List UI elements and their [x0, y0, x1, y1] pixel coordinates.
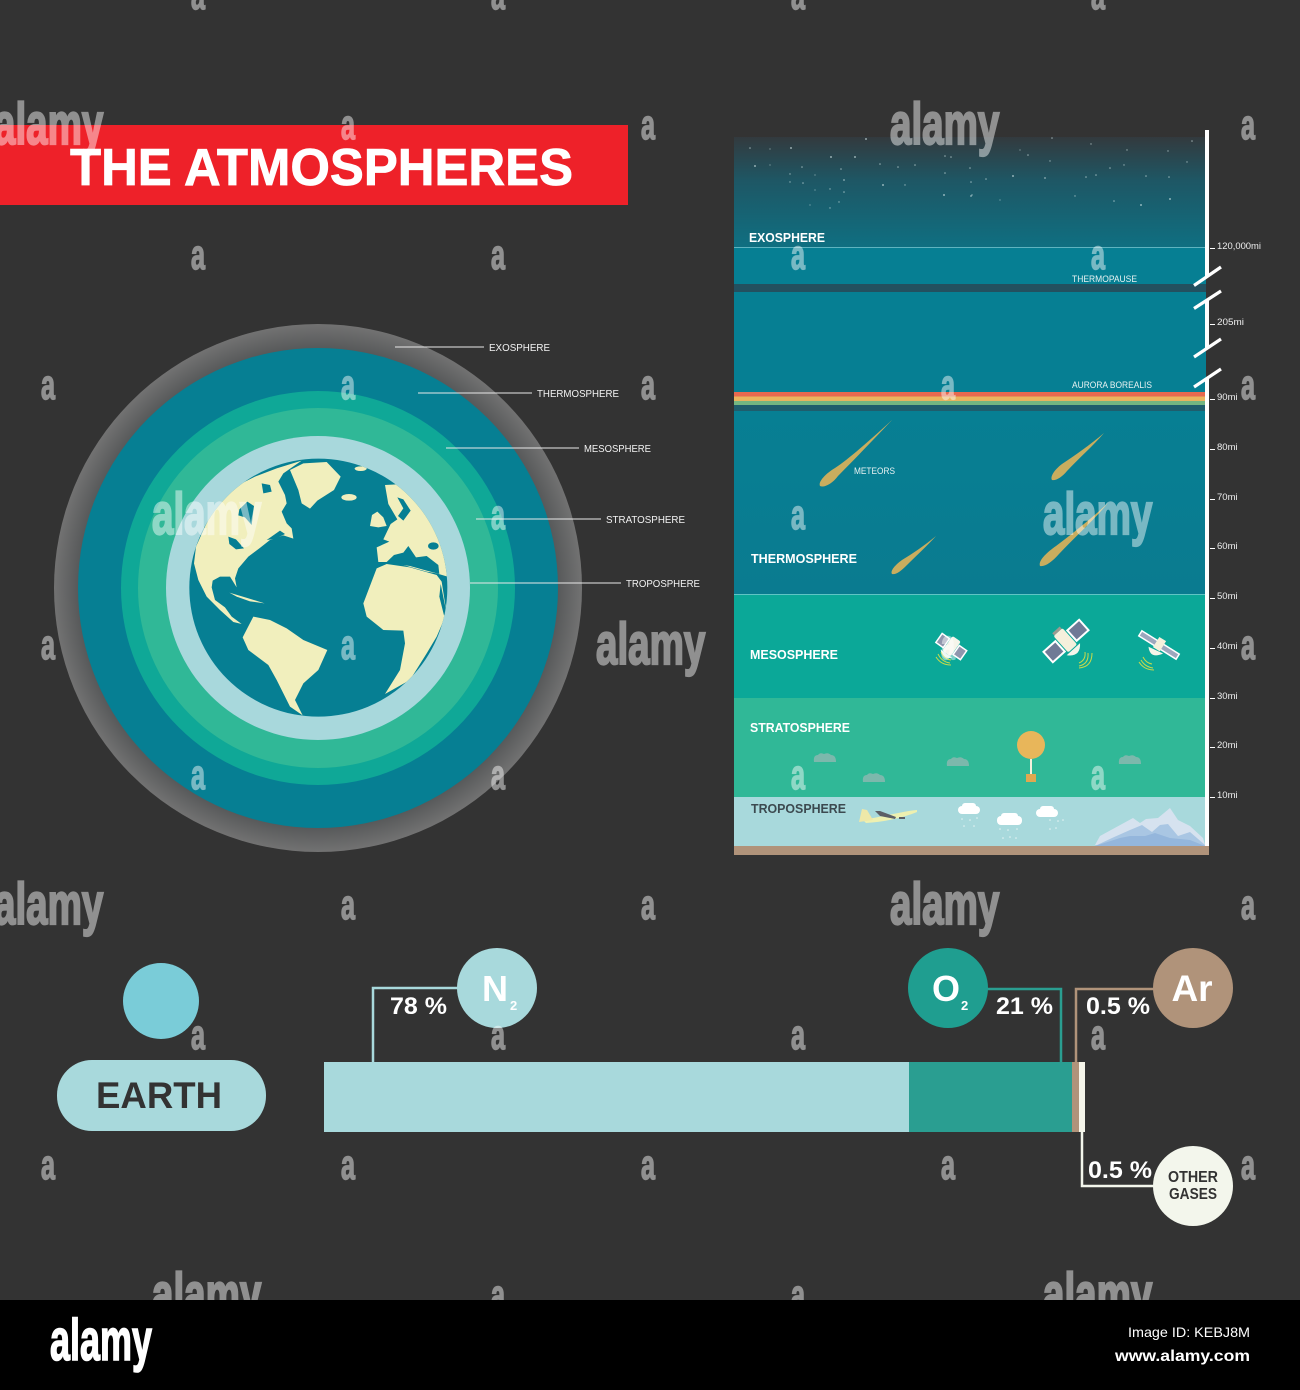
watermarks: a — [641, 1143, 656, 1189]
watermarks: a — [1091, 1013, 1106, 1059]
watermarks: a — [1241, 103, 1256, 149]
icons: satellite signal arcs — [936, 652, 1154, 670]
callout: other gases: 0.5 % — [1088, 1157, 1152, 1184]
watermarks: a — [341, 103, 356, 149]
callout: oxygen: O — [932, 968, 960, 1009]
callout: oxygen — [908, 948, 1061, 1062]
altitude scale: 60mi — [1217, 541, 1238, 552]
callout: other gases: OTHER — [1168, 1169, 1218, 1186]
callout: nitrogen: N — [482, 968, 508, 1009]
watermarks: a — [341, 883, 356, 929]
altitude scale: 90mi — [1217, 392, 1238, 403]
title banner — [0, 125, 628, 205]
watermarks: a — [491, 1013, 506, 1059]
watermarks: a — [341, 623, 356, 669]
label: exosphere: EXOSPHERE — [489, 342, 550, 354]
watermarks: alamy — [152, 482, 262, 547]
watermarks: a — [491, 233, 506, 279]
stratosphere layer — [734, 698, 1206, 797]
watermarks: a — [41, 623, 56, 669]
thermosphere layer — [734, 411, 1206, 594]
watermarks: a — [491, 753, 506, 799]
icon: weather balloon — [1017, 731, 1045, 782]
altitude scale: 80mi — [1217, 442, 1238, 453]
watermarks: alamy — [152, 1262, 262, 1327]
callout: other gases: GASES — [1169, 1186, 1217, 1203]
watermarks: a — [941, 623, 956, 669]
mesosphere layer — [734, 595, 1206, 698]
watermarks: a — [341, 1143, 356, 1189]
watermarks: a — [641, 103, 656, 149]
watermarks: a — [191, 1013, 206, 1059]
footer bar: www.alamy.com — [1114, 1348, 1250, 1365]
label: stratosphere: STRATOSPHERE — [606, 514, 685, 526]
watermarks: a — [791, 233, 806, 279]
concentric atmosphere globe diagram — [54, 324, 582, 852]
earth label pill — [57, 1060, 266, 1131]
watermarks: a — [941, 1143, 956, 1189]
callout: oxygen: 2 — [961, 998, 968, 1013]
labels: globe layers — [395, 342, 700, 590]
watermarks: a — [941, 363, 956, 409]
watermarks: a — [41, 1143, 56, 1189]
altitude scale: 30mi — [1217, 691, 1238, 702]
watermarks: a — [341, 363, 356, 409]
callout: oxygen: 21 % — [996, 993, 1053, 1020]
title banner: THE ATMOSPHERES — [70, 139, 573, 197]
panel: atmosphere layer cross-section — [734, 130, 1261, 855]
exosphere layer — [734, 137, 1206, 284]
watermarks: a — [191, 233, 206, 279]
layer name: troposphere: TROPOSPHERE — [751, 801, 846, 816]
watermarks: a — [41, 363, 56, 409]
callout: argon — [1076, 948, 1233, 1062]
altitude scale: 70mi — [1217, 492, 1238, 503]
icon: satellite 2 — [1038, 614, 1095, 669]
icons: meteors — [820, 420, 1108, 574]
footer bar: Image ID: KEBJ8M — [1128, 1324, 1250, 1340]
icons: rain clouds — [958, 803, 1064, 839]
aurora bands — [734, 392, 1206, 411]
footer bar — [0, 1300, 1300, 1390]
watermarks: a — [191, 753, 206, 799]
layer name: stratosphere: STRATOSPHERE — [750, 720, 850, 735]
earth label pill: EARTH — [96, 1075, 222, 1116]
altitude scale: 10mi — [1217, 790, 1238, 801]
watermarks: a — [1241, 883, 1256, 929]
altitude scale: 20mi — [1217, 740, 1238, 751]
watermarks: a — [791, 1273, 806, 1319]
ground strip — [734, 846, 1209, 855]
watermarks: alamy — [890, 872, 1000, 937]
watermarks: a — [641, 883, 656, 929]
icon: satellite 3 — [1134, 627, 1181, 666]
watermarks: alamy — [890, 92, 1000, 157]
troposphere layer — [734, 797, 1206, 846]
callout: other gases — [1082, 1132, 1233, 1226]
label: thermosphere: THERMOSPHERE — [537, 388, 619, 400]
label: meteors: METEORS — [854, 466, 895, 476]
label: troposphere: TROPOSPHERE — [626, 578, 700, 590]
altitude scale: 50mi — [1217, 591, 1238, 602]
callout: nitrogen — [373, 948, 537, 1062]
watermarks: a — [641, 363, 656, 409]
watermarks: a — [1241, 623, 1256, 669]
icons: stratosphere clouds — [814, 753, 1141, 782]
upper thermosphere — [734, 292, 1206, 392]
watermarks: a — [1091, 753, 1106, 799]
callout: nitrogen: 2 — [510, 998, 517, 1013]
layer name: mesosphere: MESOSPHERE — [750, 647, 838, 662]
callout: argon: Ar — [1171, 968, 1213, 1009]
callout: argon: 0.5 % — [1086, 993, 1150, 1020]
thermopause band — [734, 284, 1206, 292]
watermarks: alamy — [596, 612, 706, 677]
callout: nitrogen: 78 % — [390, 993, 447, 1020]
altitude scale: 120,000mi — [1217, 241, 1261, 252]
layer name: exosphere: EXOSPHERE — [749, 230, 825, 245]
label: mesosphere: MESOSPHERE — [584, 443, 651, 455]
icon: earth circle — [123, 963, 199, 1039]
watermarks: a — [491, 1273, 506, 1319]
watermarks: alamy — [1043, 482, 1153, 547]
watermarks: a — [791, 1013, 806, 1059]
layer name: thermosphere: THERMOSPHERE — [751, 551, 857, 566]
panel: gas composition bar — [324, 1062, 1085, 1132]
altitude scale — [1194, 130, 1261, 846]
altitude scale: 40mi — [1217, 641, 1238, 652]
icon: airplane — [859, 809, 917, 823]
watermarks: a — [791, 493, 806, 539]
watermarks: a — [791, 753, 806, 799]
icon: satellite 1 — [932, 630, 969, 665]
altitude scale: 205mi — [1217, 317, 1244, 328]
watermarks: a — [1091, 233, 1106, 279]
label: thermopause: THERMOPAUSE — [1072, 274, 1137, 284]
icon: earth globe — [189, 459, 450, 717]
icon: mountain — [1095, 808, 1205, 846]
footer bar: alamy — [50, 1308, 152, 1373]
watermarks: a — [1241, 1143, 1256, 1189]
watermarks: a — [1241, 363, 1256, 409]
watermarks: alamy — [1043, 1262, 1153, 1327]
watermarks: a — [491, 493, 506, 539]
label: aurora borealis: AURORA BOREALIS — [1072, 380, 1152, 390]
